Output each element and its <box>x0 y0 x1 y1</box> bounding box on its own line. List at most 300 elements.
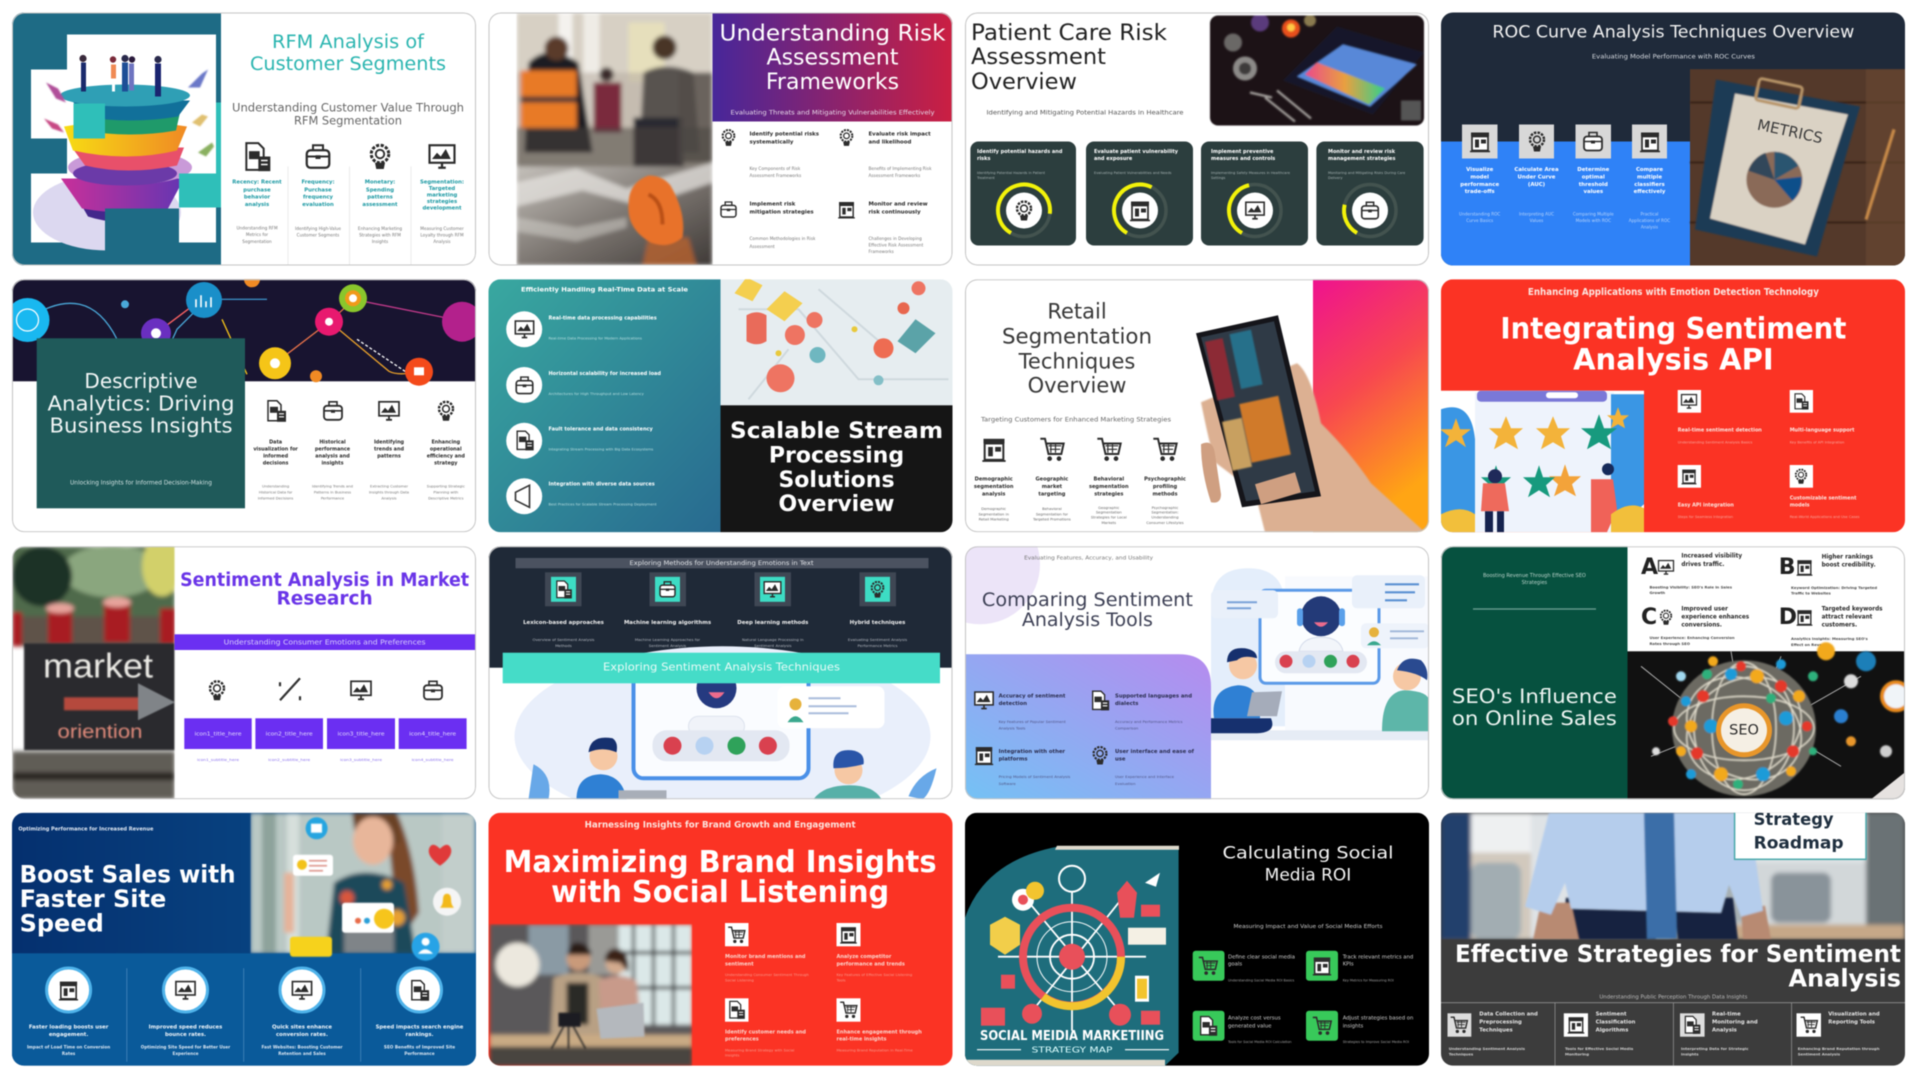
item titles: models <box>1790 502 1810 508</box>
banner <box>503 653 940 683</box>
item notes: Challenges in Developing <box>868 236 922 241</box>
column titles: Compare <box>1636 167 1663 173</box>
icons row <box>246 143 454 171</box>
item notes: Key Metrics for Measuring ROI <box>1343 979 1394 983</box>
item notes: Understanding Consumer Sentiment Through <box>725 973 810 977</box>
column notes: Tools for Effective Social Media <box>1565 1046 1634 1051</box>
column titles: Spending <box>366 188 394 194</box>
column notes <box>1459 212 1670 229</box>
column notes: Performance <box>321 497 345 501</box>
column notes: Segmentation <box>242 239 272 244</box>
step card 1: Identifying Potential Hazards in Patient <box>977 171 1046 175</box>
column titles: Monitoring and <box>1712 1019 1758 1025</box>
column titles: Frequency: <box>301 180 335 186</box>
item notes: Key Components of Risk <box>750 166 801 171</box>
column titles: profiling <box>1153 484 1177 490</box>
column notes: Identifying Trends and <box>312 485 353 489</box>
column notes: Models with ROC <box>1576 218 1611 223</box>
title <box>250 32 446 75</box>
item titles: sentiment <box>725 961 754 967</box>
column titles: Quick sites enhance <box>272 1025 332 1031</box>
decorative teal blocks <box>74 104 221 266</box>
title: with Social Listening <box>551 875 889 910</box>
title: Descriptive <box>84 369 198 393</box>
list notes: Best Practices for Scalable Stream Processing Deployment <box>548 503 657 507</box>
item titles: Improved user <box>1681 606 1728 612</box>
column notes: Sentiment Analysis <box>649 643 686 648</box>
item titles: Increased visibility <box>1681 554 1742 560</box>
icons grid <box>721 130 855 218</box>
column titles: Determine <box>1577 167 1610 173</box>
item titles: Identify potential risks <box>750 132 819 138</box>
item titles <box>725 954 922 1042</box>
column titles: conversion rates. <box>276 1032 328 1038</box>
photo: woman with social icons <box>250 813 476 961</box>
photo: creators with camera and laptop <box>490 924 692 1067</box>
feature titles: Integration with other <box>999 749 1065 755</box>
kicker: Evaluating Features, Accuracy, and Usability <box>1024 556 1153 562</box>
column notes: Segmentation in <box>978 512 1010 516</box>
step card 4: Delivery <box>1328 176 1343 180</box>
column notes: Loyalty through RFM <box>420 232 464 238</box>
title: Faster Site <box>20 885 166 913</box>
column notes: Comparing Multiple <box>1573 212 1614 217</box>
list notes: Real-time Data Processing for Modern Applications <box>548 337 642 341</box>
title: Integrating Sentiment <box>1500 311 1847 345</box>
column notes: Overview of Sentiment Analysis <box>533 637 594 642</box>
column notes: Techniques <box>1449 1052 1474 1057</box>
title: Understanding Risk <box>720 22 946 46</box>
column titles: evaluation <box>302 202 334 208</box>
column notes: Rates <box>62 1051 76 1056</box>
panel: blue lower band <box>1441 142 1690 266</box>
title: Solutions <box>778 468 895 493</box>
feature notes: Software <box>999 781 1016 786</box>
label: Strategy Roadmap tag: Roadmap <box>1754 833 1844 853</box>
column titles: Recency: Recent <box>232 180 282 186</box>
heading bar: Exploring Methods for Understanding Emotions in Text <box>630 560 814 567</box>
subtitle: Identifying and Mitigating Potential Hazards in Healthcare <box>986 108 1184 116</box>
title: Scalable Stream <box>730 419 943 444</box>
column notes: Targeted Promotions <box>1032 517 1071 521</box>
card: SEO's Influence on Online Sales <box>1441 546 1912 800</box>
item titles: Customizable sentiment <box>1790 496 1857 502</box>
column notes <box>258 485 465 501</box>
decorative lavender circle <box>920 504 1040 624</box>
photo: businessman at table <box>1441 813 1905 940</box>
feature titles <box>999 694 1195 762</box>
title: Analysis Tools <box>1022 609 1153 631</box>
title: Maximizing Brand Insights <box>504 845 937 880</box>
column notes: Applications of ROC <box>1629 218 1670 223</box>
item titles: conversions. <box>1681 622 1722 628</box>
photo: blurred workshop with orange object <box>516 12 712 266</box>
panel: gradient features <box>965 654 1211 799</box>
card: Boost Sales with Faster Site Speed <box>12 813 476 1066</box>
title: Analytics: Driving <box>48 391 234 415</box>
title <box>1455 940 1901 992</box>
column titles: Reporting Tools <box>1828 1019 1875 1025</box>
column titles: effectively <box>1634 189 1666 195</box>
title: Frameworks <box>766 70 899 95</box>
title <box>982 589 1193 631</box>
title: Media ROI <box>1265 866 1351 886</box>
column notes <box>236 226 464 244</box>
item titles: Multi-language support <box>1790 428 1855 434</box>
item titles <box>1681 554 1883 628</box>
title: Processing <box>769 443 904 468</box>
column titles: Sentiment <box>1596 1011 1627 1017</box>
column titles <box>1479 1011 1880 1033</box>
column titles: Visualize <box>1466 167 1494 173</box>
column titles: targeting <box>1038 491 1066 497</box>
column titles: segmentation <box>974 484 1014 490</box>
item titles: Monitor and review <box>868 202 928 208</box>
column titles: Improved speed reduces <box>149 1025 222 1031</box>
label: Strategy Roadmap tag <box>1735 809 1866 859</box>
column titles: market <box>1042 484 1063 490</box>
green icon tiles <box>1193 951 1338 1041</box>
column notes: Analysis <box>433 239 451 244</box>
panel: pink to orange gradient <box>1313 279 1429 532</box>
title: Techniques <box>1018 350 1135 374</box>
icons row <box>268 401 453 422</box>
step card 3: Implementing Safety Measures in Healthcare <box>1211 171 1290 175</box>
item titles: attract relevant <box>1822 614 1873 620</box>
title: Overview <box>779 492 894 517</box>
photo: metrics clipboard on wood: METRICS <box>1756 116 1824 147</box>
column titles: Targeted <box>429 186 455 192</box>
column titles: purchase <box>243 188 271 194</box>
item notes: Tools <box>836 979 846 983</box>
kicker: Optimizing Performance for Increased Revenue <box>18 827 154 833</box>
item titles: KPIs <box>1343 962 1354 968</box>
column notes: Practical <box>1641 212 1658 217</box>
purple label tiles: icon2_title_here <box>266 731 313 737</box>
icon tiles <box>1678 390 1813 488</box>
item notes: Real-World Applications and Use Cases <box>1790 515 1860 519</box>
item notes: Boosting Visibility: SEO's Role in Sales <box>1650 584 1733 589</box>
title <box>1452 685 1617 730</box>
item notes: Understanding Sentiment Analysis Basics <box>1678 440 1753 444</box>
column notes: Descriptive Metrics <box>428 497 464 501</box>
step card 1: Identify potential hazards and <box>977 149 1063 155</box>
feature notes: Analysis Tools <box>999 725 1025 730</box>
item notes <box>1678 440 1860 519</box>
column titles: Segmentation: <box>420 180 464 186</box>
panel: gradient header <box>712 12 952 122</box>
item titles: Real-time sentiment detection <box>1678 428 1762 434</box>
column titles: Identifying <box>374 440 405 446</box>
column notes <box>978 506 1184 525</box>
column titles: model <box>1470 174 1489 180</box>
panel: green title <box>1441 546 1628 799</box>
item notes: Assessment Frameworks <box>868 173 920 178</box>
feature titles: platforms <box>999 756 1028 762</box>
column notes: Optimizing Site Speed for Better User <box>141 1045 231 1050</box>
item titles: Implement risk <box>750 202 796 208</box>
column notes: Geographic <box>1098 506 1119 510</box>
title: Assessment <box>767 46 899 71</box>
column titles: Faster loading boosts user <box>29 1025 109 1031</box>
label subtitles: icon1_subtitle_here <box>197 757 240 762</box>
column notes: SEO Benefits of Improved Site <box>384 1045 455 1050</box>
item notes <box>750 166 932 254</box>
card: Patient Care Risk Assessment Overview <box>965 12 1429 266</box>
card: Comparing Sentiment Analysis Tools <box>920 504 1429 799</box>
column notes: Retention and Sales <box>278 1051 326 1056</box>
item titles <box>1228 954 1413 1029</box>
item titles: performance and trends <box>836 961 905 967</box>
title: SEO's Influence <box>1452 685 1617 708</box>
column titles: optimal <box>1582 174 1605 180</box>
item notes: Key Benefits of API Integration <box>1790 440 1844 444</box>
column titles: visualization for <box>253 447 298 453</box>
item titles: generated value <box>1228 1023 1272 1029</box>
item notes: Effect on Revenue <box>1791 642 1830 647</box>
title <box>48 369 234 438</box>
item titles: Monitor brand mentions and <box>725 954 806 960</box>
column notes <box>27 1044 455 1056</box>
subtitle band <box>174 634 476 650</box>
letters and icons: B <box>1779 555 1795 580</box>
step card 2: Evaluating Patient Vulnerabilities and Needs <box>1094 171 1172 175</box>
column titles: methods <box>1152 491 1178 497</box>
title <box>180 570 469 610</box>
column titles: marketing <box>427 192 458 198</box>
item titles: Identify customer needs and <box>725 1029 806 1035</box>
feature titles: Supported languages and <box>1115 694 1192 700</box>
column notes: Strategies for Local <box>1091 515 1127 519</box>
panel: teal gradient list <box>488 279 720 532</box>
subtitle <box>232 100 464 128</box>
column titles: Under Curve <box>1518 174 1556 180</box>
list titles <box>548 316 661 488</box>
column titles: trends and <box>374 447 404 453</box>
item titles: customers. <box>1822 622 1857 628</box>
column titles: rankings. <box>405 1032 434 1038</box>
icon: layered segment pyramid <box>33 84 192 250</box>
icon: team of standing people <box>79 55 162 96</box>
kicker: Harnessing Insights for Brand Growth and Engagement <box>585 820 856 830</box>
item titles: Define clear social media <box>1228 954 1295 960</box>
step card 2 <box>1086 142 1193 246</box>
step card 4: Monitoring and Mitigating Risks During Care <box>1328 171 1405 175</box>
panel: green title: Strategies <box>1522 580 1548 586</box>
column titles: analysis <box>982 491 1005 497</box>
feature notes: Accuracy and Performance Metrics <box>1115 719 1183 724</box>
column notes: Fast Websites: Boosting Customer <box>261 1045 343 1050</box>
icon tiles <box>545 572 896 606</box>
icon tiles <box>1462 124 1667 158</box>
column titles: Data <box>269 440 282 446</box>
list notes: Architectures for High Throughput and Low Latency <box>548 392 645 396</box>
title: Research <box>277 588 373 609</box>
item notes: Keyword Optimization: Driving Targeted <box>1791 585 1877 590</box>
column titles: Real-time <box>1712 1011 1741 1017</box>
column titles: performance <box>315 447 351 453</box>
step card 3: measures and controls <box>1211 156 1275 162</box>
column titles: threshold <box>1579 182 1608 188</box>
column notes: Interpreting AUC <box>1519 212 1554 217</box>
step card 1: Treatment <box>976 176 995 180</box>
column notes: Sentiment Analysis <box>1798 1052 1841 1057</box>
item titles: Targeted keywords <box>1822 606 1883 612</box>
item titles: Adjust strategies based on <box>1343 1016 1413 1022</box>
card: Retail Segmentation Techniques <box>965 279 1429 532</box>
title <box>730 419 943 517</box>
step card 3: Implement preventive <box>1211 149 1274 155</box>
title: Overview <box>1028 374 1126 398</box>
item notes: Measuring Brand Strategy with Social <box>725 1049 794 1053</box>
column notes: Behavioral <box>1042 507 1062 511</box>
column notes: Markets <box>1101 521 1116 525</box>
item titles <box>1678 428 1857 508</box>
item notes: Assessment <box>750 244 775 249</box>
column notes: Segmentation: <box>1151 510 1179 514</box>
column notes: Enhancing Marketing <box>358 226 402 231</box>
title: Overview <box>971 69 1077 95</box>
feature notes: Comparison <box>1115 725 1139 730</box>
column titles: Behavioral <box>1093 476 1124 482</box>
column titles: multiple <box>1637 174 1662 180</box>
list titles: Horizontal scalability for increased load <box>548 371 661 377</box>
column notes: Machine Learning Approaches for <box>635 637 700 642</box>
column titles: development <box>422 206 462 212</box>
icon circles <box>506 311 542 514</box>
title: Segmentation <box>1002 325 1152 349</box>
subtitle: Understanding Public Perception Through Data Insights <box>1599 995 1747 1001</box>
column titles: Classification <box>1596 1019 1636 1025</box>
item titles: Easy API integration <box>1678 502 1734 508</box>
icon tiles <box>725 923 860 1022</box>
column titles: efficiency and <box>427 454 465 460</box>
feature titles: detection <box>999 701 1027 707</box>
illustration: hand holding phone <box>1196 315 1425 532</box>
column titles <box>253 440 465 467</box>
step card 1 <box>970 142 1076 246</box>
photo: market chalkboard <box>12 536 182 799</box>
title: Calculating Social <box>1222 843 1394 863</box>
label subtitles: icon2_subtitle_here <box>268 757 311 762</box>
item notes: Assessment Frameworks <box>750 173 801 178</box>
item notes: Tools for Social Media ROI Calculation <box>1227 1040 1292 1044</box>
step card 3 <box>1201 142 1308 246</box>
card: Descriptive Analytics <box>6 271 482 532</box>
column titles: analysis and <box>315 454 350 460</box>
feature notes: Key Features of Popular Sentiment <box>999 719 1066 724</box>
illustration: isometric flow blocks <box>720 277 952 405</box>
column notes: Performance <box>404 1051 435 1056</box>
title <box>20 860 236 937</box>
column notes: Understanding <box>262 485 289 489</box>
subtitle: RFM Segmentation <box>294 114 402 128</box>
heading: Efficiently Handling Real-Time Data at Scale <box>521 286 689 294</box>
column notes: Values <box>1530 218 1543 223</box>
column titles: analysis <box>245 202 269 208</box>
letters and icons <box>1641 555 1812 630</box>
panel: dark top band <box>488 546 952 668</box>
column notes: Analysis <box>1641 224 1658 229</box>
item notes: Insights <box>725 1054 739 1058</box>
column notes: Understanding Sentiment Analysis <box>1449 1046 1526 1051</box>
kicker: Enhancing Applications with Emotion Detection Technology <box>1528 287 1819 298</box>
item notes: Strategies to Improve Social Media ROI <box>1343 1040 1409 1044</box>
map title text: STRATEGY MAP <box>1032 1046 1113 1055</box>
feature notes: Pricing Models of Sentiment Analysis <box>999 774 1070 779</box>
icon rings <box>47 968 441 1012</box>
column titles: performance <box>1460 182 1499 188</box>
column notes: Planning with <box>433 491 459 495</box>
card: Scalable Stream Processing <box>488 277 952 532</box>
step card 2: Evaluate patient vulnerability <box>1094 149 1179 155</box>
label: Strategy Roadmap tag: Strategy <box>1754 810 1834 830</box>
banner: Exploring Sentiment Analysis Techniques <box>603 662 840 674</box>
column titles: operational <box>430 447 462 453</box>
item notes: Rates through SEO <box>1650 641 1691 646</box>
title <box>1500 311 1847 376</box>
subtitle: Targeting Customers for Enhanced Marketing Strategies <box>980 416 1171 423</box>
card: Integrating Sentiment Analysis API <box>1440 279 1905 532</box>
column notes <box>533 637 907 648</box>
title: Business Insights <box>50 414 232 438</box>
column titles: Purchase <box>304 188 332 194</box>
feature notes: User Experience and Interface <box>1115 774 1175 779</box>
column notes: Sentiment Analysis <box>754 643 791 648</box>
feature titles: User interface and ease of <box>1115 749 1195 755</box>
item notes: Understanding Social Media ROI Basics <box>1228 979 1295 983</box>
column notes: Insights <box>372 239 388 244</box>
column notes: Monitoring <box>1565 1052 1589 1057</box>
column notes: Metrics for <box>246 232 268 237</box>
column titles: Historical <box>319 440 346 446</box>
subtitle: Unlocking Insights for Informed Decision-Making <box>70 480 212 486</box>
feature titles: dialects <box>1115 701 1138 707</box>
column notes: Supporting Strategic <box>427 485 465 489</box>
column notes: Experience <box>172 1051 199 1056</box>
column notes: Insights <box>1681 1052 1699 1057</box>
card: Calculating Social Media ROI <box>965 813 1429 1066</box>
feature titles: use <box>1115 756 1126 762</box>
column titles: Monetary: <box>365 180 395 186</box>
column notes: Patterns in Business <box>314 491 351 495</box>
column titles <box>1460 167 1666 195</box>
illustration: robot and users <box>1211 568 1429 740</box>
item titles: Higher rankings <box>1822 554 1874 560</box>
item titles: real-time insights <box>836 1036 886 1042</box>
feature notes <box>999 719 1183 786</box>
title: on Online Sales <box>1452 707 1617 730</box>
photo: metrics clipboard on wood <box>1690 69 1905 266</box>
item notes: Growth <box>1650 590 1665 595</box>
column titles: Techniques <box>1479 1027 1513 1033</box>
chalk text: market <box>43 647 154 685</box>
item notes <box>1650 584 1877 647</box>
column titles <box>232 180 464 212</box>
item notes <box>1227 979 1409 1044</box>
label subtitles: icon3_subtitle_here <box>340 757 383 762</box>
column titles: behavior <box>244 194 271 200</box>
column notes: Measuring Customer <box>420 226 464 231</box>
panel: black title box <box>720 405 952 532</box>
step card 3: Settings <box>1211 176 1226 180</box>
illustration: social media strategy map <box>965 846 1179 1066</box>
column titles: (AUC) <box>1528 182 1545 188</box>
title: Sentiment Analysis in Market <box>180 570 469 591</box>
step card 2: and exposure <box>1094 156 1133 162</box>
column titles: strategy <box>434 461 458 467</box>
item notes: Steps for Seamless Integration <box>1678 515 1733 519</box>
